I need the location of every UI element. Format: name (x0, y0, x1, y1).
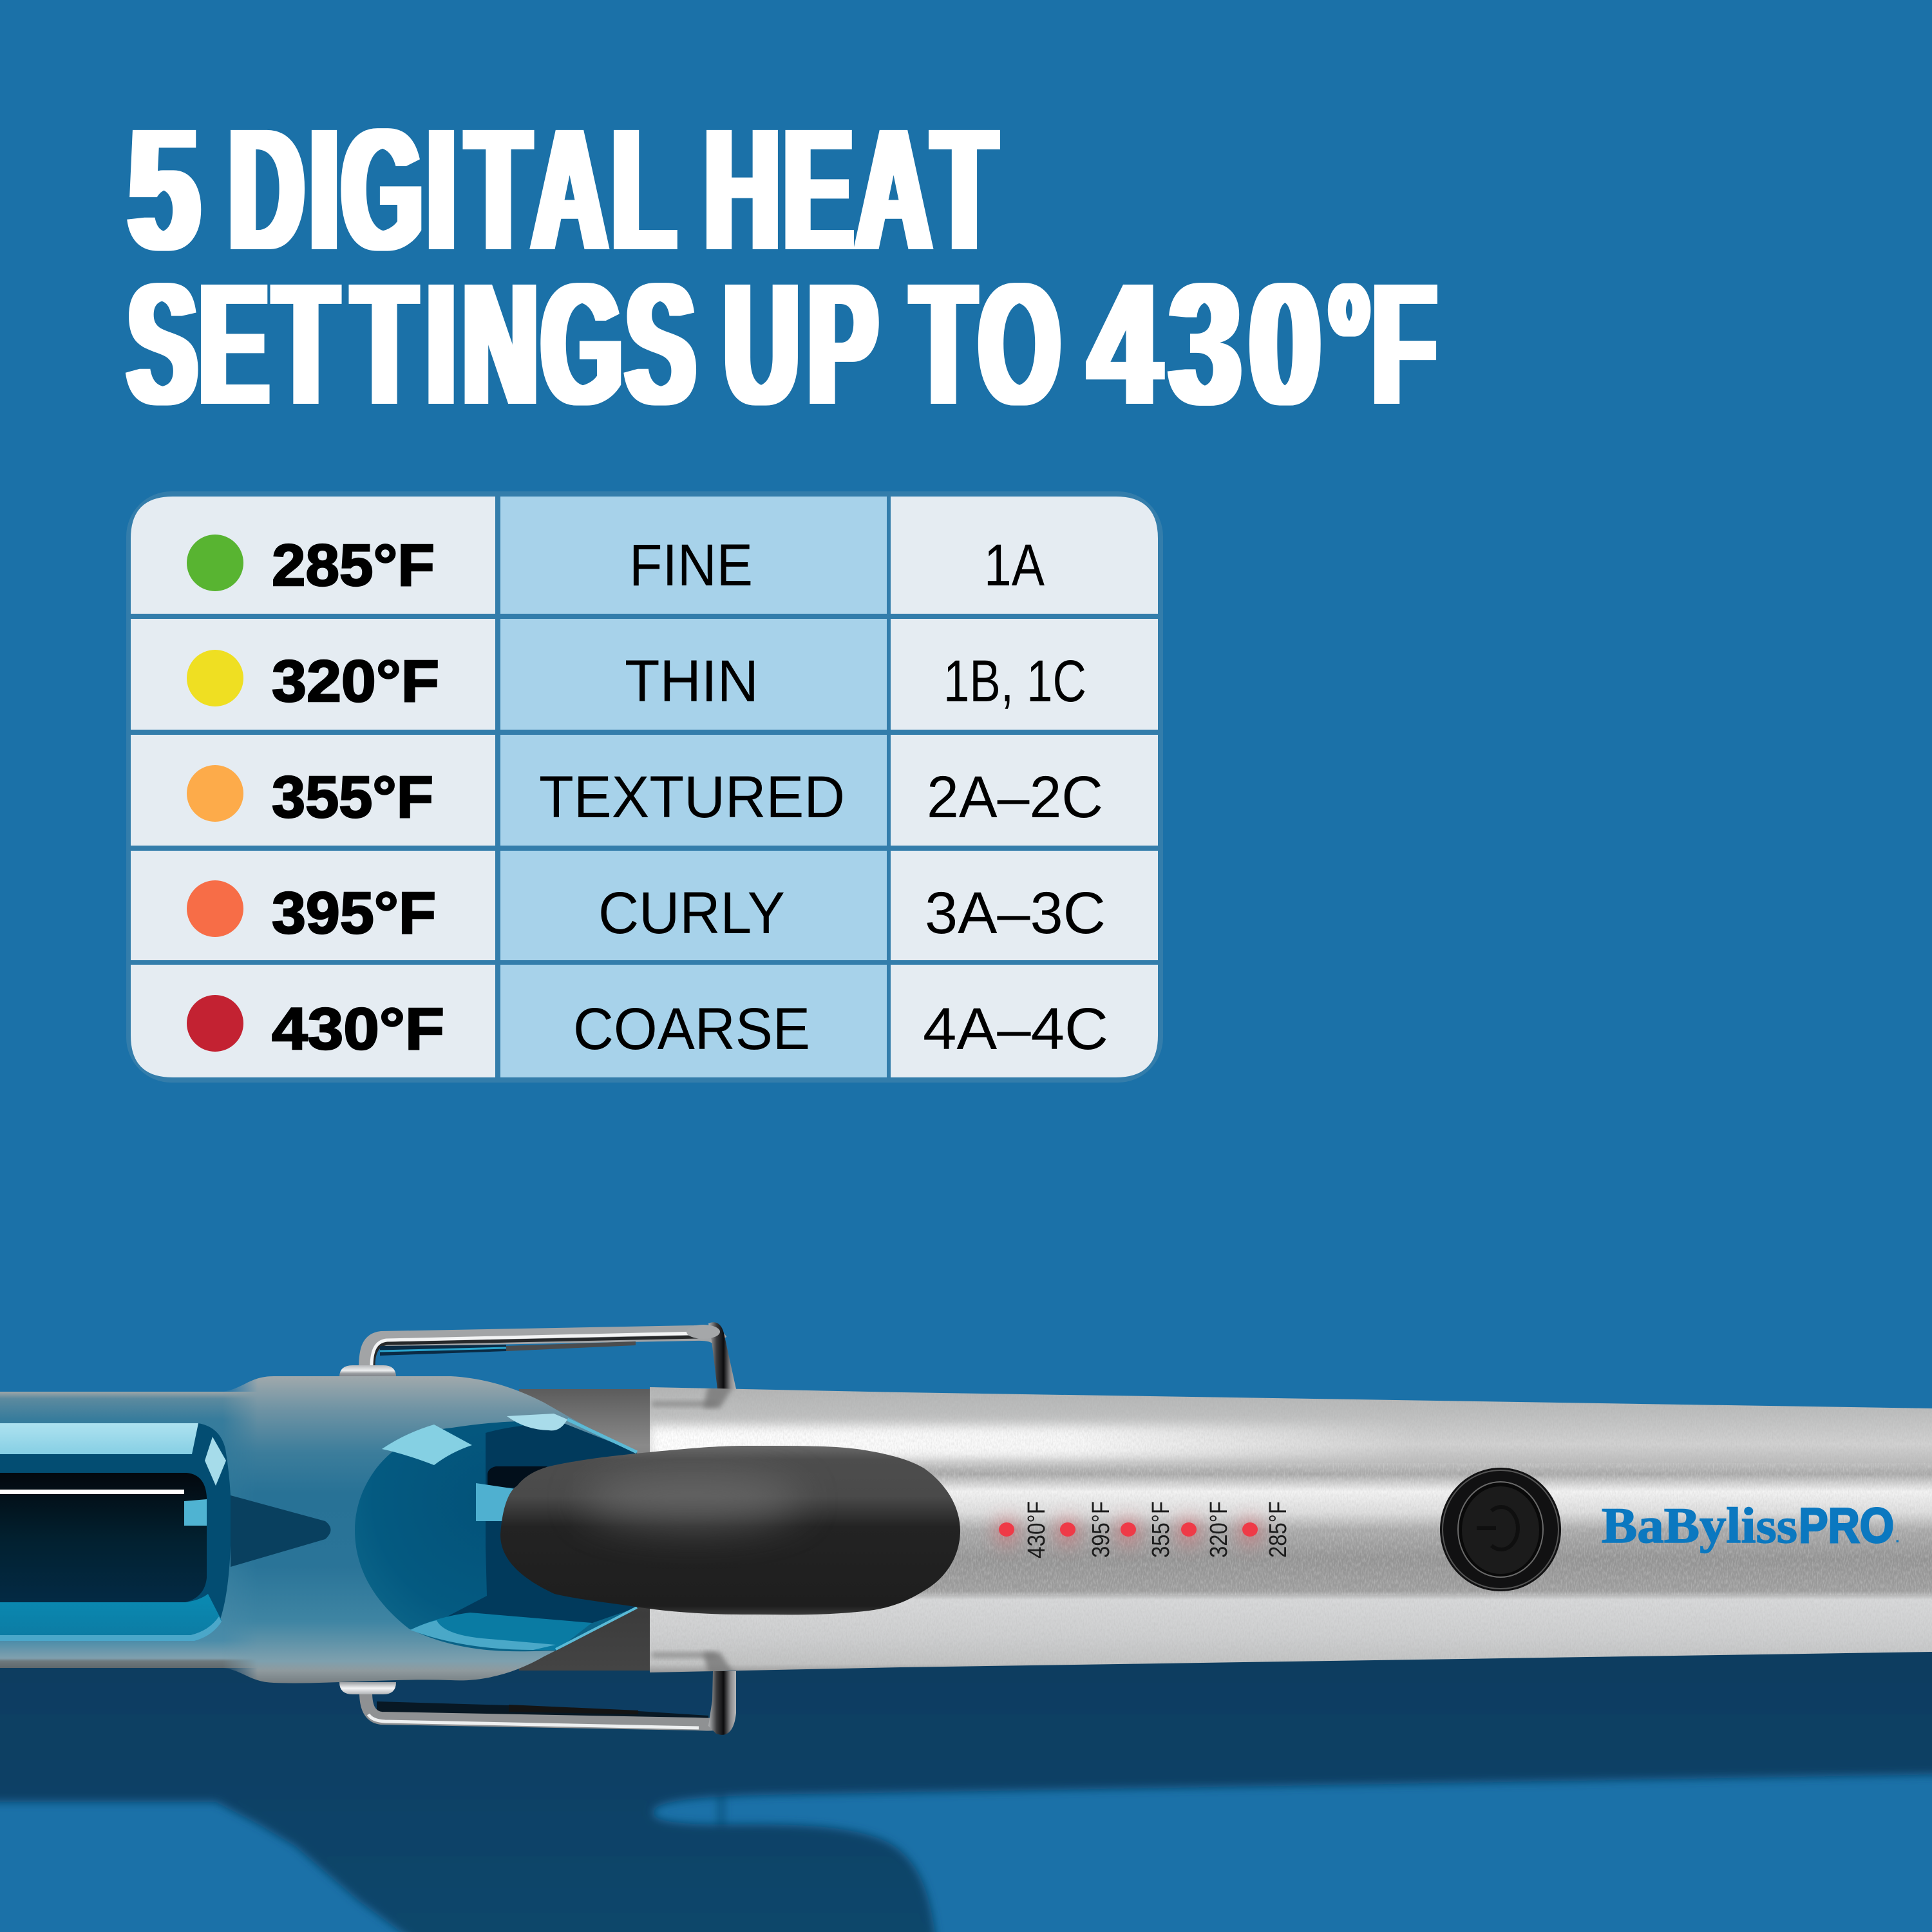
lens reflection (476, 1483, 515, 1521)
window top highlight (0, 1423, 198, 1454)
heading: SETTINGS UP TO (128, 247, 1060, 441)
heading: 430 (1089, 248, 1321, 441)
LED temperature labels: 395°F (1088, 1501, 1115, 1558)
BaBylissPRO logo: . (1895, 1529, 1900, 1546)
window black panel (0, 1473, 207, 1602)
temperature labels: 395°F (272, 880, 436, 946)
temperature labels: 355°F (272, 764, 433, 830)
blue barrel (0, 1392, 258, 1668)
window side highlight (205, 1437, 226, 1486)
hair type labels: 1A (984, 533, 1045, 598)
lens highlight: top right (507, 1414, 567, 1430)
shadow of curling iron (0, 1610, 1932, 1932)
column: hair type (891, 497, 1158, 1077)
curling iron (0, 1322, 1932, 1735)
hair type labels: 2A–2C (927, 764, 1103, 830)
hair type labels (923, 533, 1108, 1062)
BaBylissPRO logo: BaByliss (1602, 1497, 1797, 1553)
hair texture labels: COARSE (573, 996, 810, 1062)
heading (128, 93, 1436, 441)
hair type labels: 4A–4C (923, 996, 1108, 1062)
bottom clamp wire (339, 1671, 736, 1735)
hair texture labels: THIN (625, 649, 759, 714)
white line (0, 1490, 184, 1494)
heading: °F (1329, 247, 1436, 441)
heading: 5 (128, 93, 200, 287)
LED temperature labels: 285°F (1265, 1501, 1292, 1558)
silver handle (650, 1385, 1932, 1674)
heat settings table (126, 491, 1163, 1083)
heading: DIGITAL HEAT (229, 93, 996, 287)
BaBylissPRO logo (1602, 1497, 1900, 1553)
LED temperature labels: 320°F (1206, 1501, 1233, 1558)
column: hair texture (500, 497, 887, 1077)
hair texture labels: CURLY (598, 880, 785, 946)
hair type labels: 1B, 1C (943, 649, 1086, 714)
LED heat indicators (996, 1517, 1260, 1546)
lens highlight: upper (382, 1425, 472, 1465)
dark collar (519, 1389, 650, 1671)
lens lower band (410, 1613, 592, 1650)
table frame (126, 491, 1163, 1083)
head notch (231, 1495, 331, 1567)
temperature labels: 320°F (272, 649, 439, 714)
head lens (355, 1414, 637, 1651)
BaBylissPRO logo: PRO (1799, 1499, 1894, 1553)
window lower panel (0, 1594, 222, 1641)
temperature dots (187, 535, 243, 1052)
temperature labels (272, 533, 444, 1062)
hair type labels: 3A–3C (925, 880, 1106, 946)
barrel window (0, 1423, 231, 1641)
black grip (500, 1446, 960, 1615)
temperature labels: 430°F (272, 996, 444, 1062)
column: temperature (131, 497, 495, 1077)
LED temperature labels (1023, 1501, 1292, 1558)
hair texture labels: TEXTURED (539, 764, 845, 830)
blue head (219, 1376, 644, 1683)
LED temperature labels: 430°F (1023, 1501, 1050, 1558)
top clamp wire (339, 1322, 736, 1389)
hair texture labels: FINE (629, 533, 753, 598)
window reflection (184, 1499, 207, 1526)
power button (1440, 1468, 1561, 1591)
lens dark inner (441, 1423, 637, 1623)
temperature labels: 285°F (272, 533, 435, 598)
hair texture labels (539, 533, 845, 1062)
LED temperature labels: 355°F (1148, 1501, 1175, 1558)
